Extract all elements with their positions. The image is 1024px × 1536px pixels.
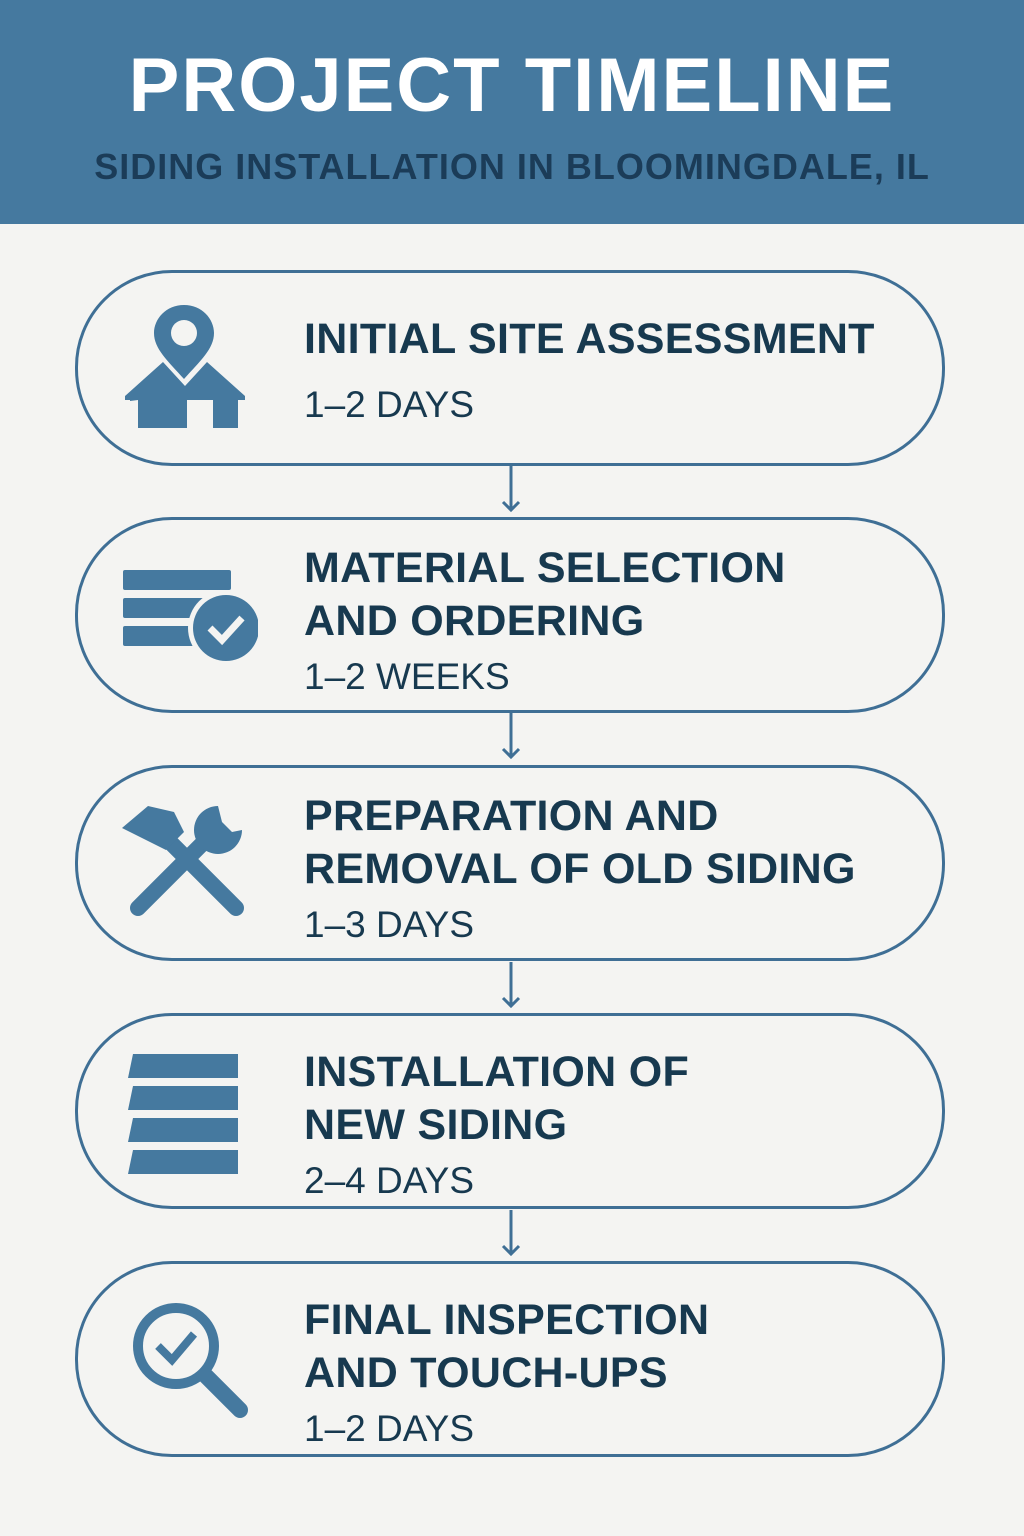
text: 1–2 DAYS — [304, 1408, 474, 1449]
arrow 2 — [502, 713, 520, 759]
text: PREPARATION AND — [304, 792, 719, 840]
text: INITIAL SITE ASSESSMENT — [304, 315, 875, 363]
text: AND ORDERING — [304, 597, 644, 645]
icon: house with location pin — [125, 305, 245, 428]
arrow 1 — [502, 466, 520, 512]
card 5: final inspection — [75, 1261, 945, 1457]
icon: magnifier with check — [133, 1303, 248, 1418]
icon: hammer and wrench — [122, 806, 244, 916]
card 1: initial site assessment — [75, 270, 945, 466]
header — [0, 0, 1024, 224]
card 2: material selection — [75, 517, 945, 713]
text: FINAL INSPECTION — [304, 1296, 709, 1344]
arrow 3 — [502, 962, 520, 1008]
text: AND TOUCH-UPS — [304, 1349, 668, 1397]
arrow 4 — [502, 1210, 520, 1256]
text — [304, 315, 875, 425]
text: 2–4 DAYS — [304, 1160, 474, 1201]
icon: stacked boards with check — [123, 570, 258, 661]
text — [304, 792, 856, 945]
title: PROJECT TIMELINE — [129, 43, 895, 128]
text: REMOVAL OF OLD SIDING — [304, 845, 856, 893]
text: 1–2 WEEKS — [304, 656, 510, 697]
card 4: installation of new siding — [75, 1013, 945, 1209]
text — [304, 544, 786, 697]
text — [304, 1296, 709, 1449]
text — [304, 1048, 689, 1201]
text: INSTALLATION OF — [304, 1048, 689, 1096]
text: 1–3 DAYS — [304, 904, 474, 945]
text: MATERIAL SELECTION — [304, 544, 786, 592]
icon: siding panels — [128, 1054, 238, 1174]
card 3: preparation and removal — [75, 765, 945, 961]
text: 1–2 DAYS — [304, 384, 474, 425]
subtitle: SIDING INSTALLATION IN BLOOMINGDALE, IL — [94, 146, 930, 187]
text: NEW SIDING — [304, 1101, 567, 1149]
